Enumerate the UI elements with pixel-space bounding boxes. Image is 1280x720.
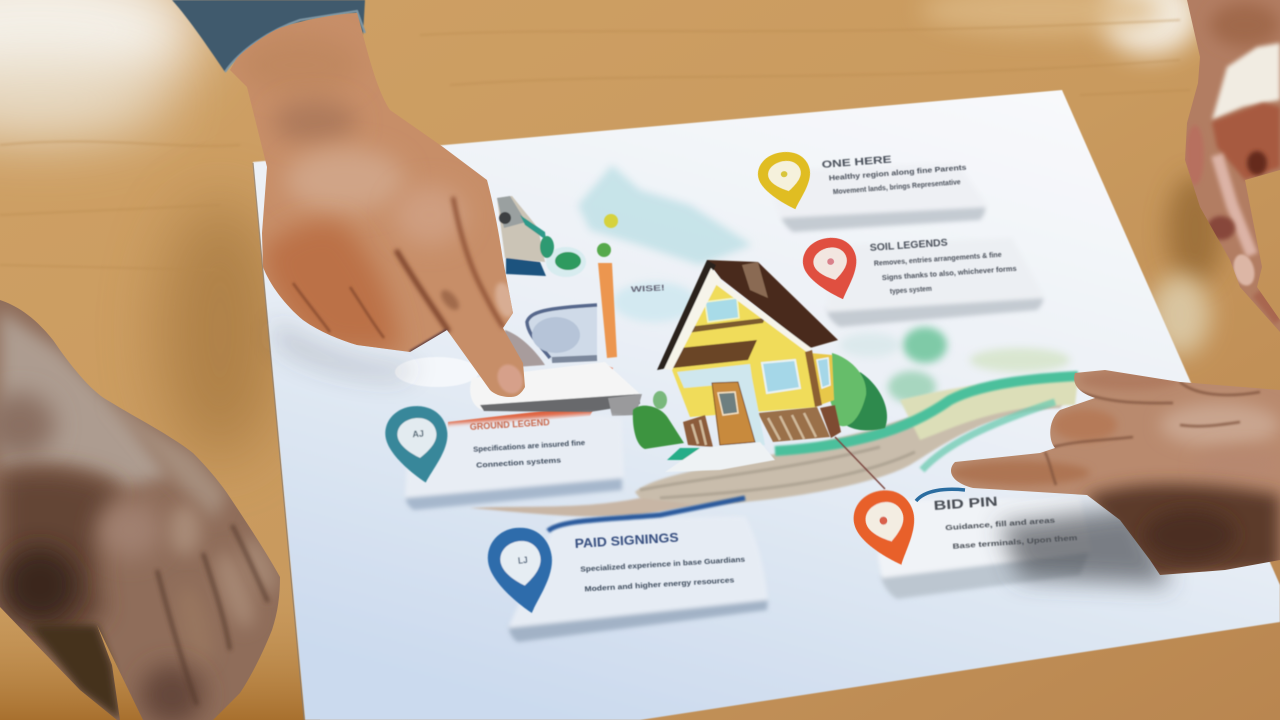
fingernail bbox=[493, 360, 527, 398]
text block: GROUND LEGEND bbox=[470, 417, 550, 432]
callout panel: teal bbox=[383, 404, 624, 510]
text block: PAID SIGNINGS bbox=[574, 531, 679, 551]
text block: Guidance, fill and areas bbox=[945, 518, 1055, 532]
porch roof bbox=[673, 340, 757, 368]
text block bbox=[470, 415, 586, 470]
icon: teal pin: AJ bbox=[412, 429, 424, 439]
house wall bbox=[672, 280, 817, 417]
card bbox=[878, 498, 1092, 599]
paper sheet bbox=[253, 90, 1280, 720]
front door bbox=[712, 382, 755, 445]
text block: Specialized experience in base Guardians bbox=[580, 555, 745, 574]
walkway bbox=[665, 442, 775, 472]
card bbox=[405, 414, 624, 510]
small note card under the finger bbox=[395, 357, 642, 416]
watercolor mountain wash bbox=[578, 165, 1070, 403]
text block bbox=[574, 527, 746, 594]
heading accent stroke bbox=[548, 498, 745, 531]
porch frame bbox=[677, 364, 765, 450]
icon: left bush bbox=[633, 391, 702, 460]
roof bbox=[657, 260, 838, 407]
icon: small building bbox=[497, 196, 586, 277]
card bbox=[825, 238, 1045, 327]
hand shadows on paper bbox=[275, 320, 1170, 585]
house illustration bbox=[633, 260, 887, 489]
icon: yellow route dot bbox=[604, 214, 618, 228]
text block: Healthy region along fine Parents bbox=[829, 165, 967, 182]
callout panel: yellow bbox=[755, 148, 988, 232]
icon: right trees bbox=[830, 353, 887, 430]
small building illustration with route bbox=[395, 196, 642, 430]
text block bbox=[933, 488, 1078, 552]
text block: Specifications are insured fine bbox=[473, 440, 585, 454]
side window bbox=[817, 358, 830, 388]
text block: Movement lands, brings Representative bbox=[833, 179, 961, 196]
right hand on the paper bbox=[940, 360, 1280, 580]
card bbox=[508, 516, 768, 642]
text block bbox=[869, 233, 1018, 297]
door window bbox=[718, 392, 738, 415]
icon: green route dot bbox=[597, 243, 611, 257]
text block bbox=[821, 149, 968, 197]
icon: red pin bbox=[799, 233, 864, 306]
text block: Modern and higher energy resources bbox=[584, 575, 735, 593]
text block: BID PIN bbox=[933, 494, 998, 513]
icon: yellow pin bbox=[755, 148, 816, 215]
text block: ONE HERE bbox=[821, 154, 892, 171]
top centre hand pointing bbox=[172, 0, 540, 410]
icon: light blue curved map area bbox=[500, 305, 597, 368]
gable window bbox=[705, 298, 739, 322]
road and river winding from the house bbox=[470, 376, 1078, 517]
hand bbox=[230, 13, 525, 397]
text block: SOIL LEGENDS bbox=[869, 238, 948, 254]
house lower siding bbox=[758, 407, 830, 442]
top right hand bbox=[1180, 0, 1280, 340]
icon: orange pin bbox=[848, 484, 925, 573]
route line bbox=[448, 263, 617, 430]
connector line to orange pin bbox=[835, 437, 885, 489]
callout panel: orange bbox=[848, 484, 1092, 599]
text block: Base terminals, Upon them bbox=[952, 535, 1078, 551]
icon: teal pin bbox=[383, 404, 451, 485]
text block: Signs thanks to also, whichever forms bbox=[882, 266, 1017, 282]
shirt sleeve bbox=[172, 0, 365, 72]
callout panel: red bbox=[799, 233, 1045, 327]
callout panel: blue bbox=[485, 498, 768, 642]
text block: Removes, entries arrangements & fine bbox=[874, 252, 1002, 268]
label: map note: WISE! bbox=[631, 283, 665, 294]
card bbox=[772, 163, 988, 232]
gable belt bbox=[687, 318, 765, 333]
text block: Connection systems bbox=[476, 457, 561, 470]
text block: types system bbox=[890, 286, 932, 296]
front window bbox=[762, 360, 800, 393]
icon: blue pin bbox=[485, 525, 557, 617]
bottom left hand bbox=[0, 290, 290, 720]
icon: blue pin: LJ bbox=[517, 554, 528, 566]
heading accent stroke bbox=[916, 489, 965, 501]
